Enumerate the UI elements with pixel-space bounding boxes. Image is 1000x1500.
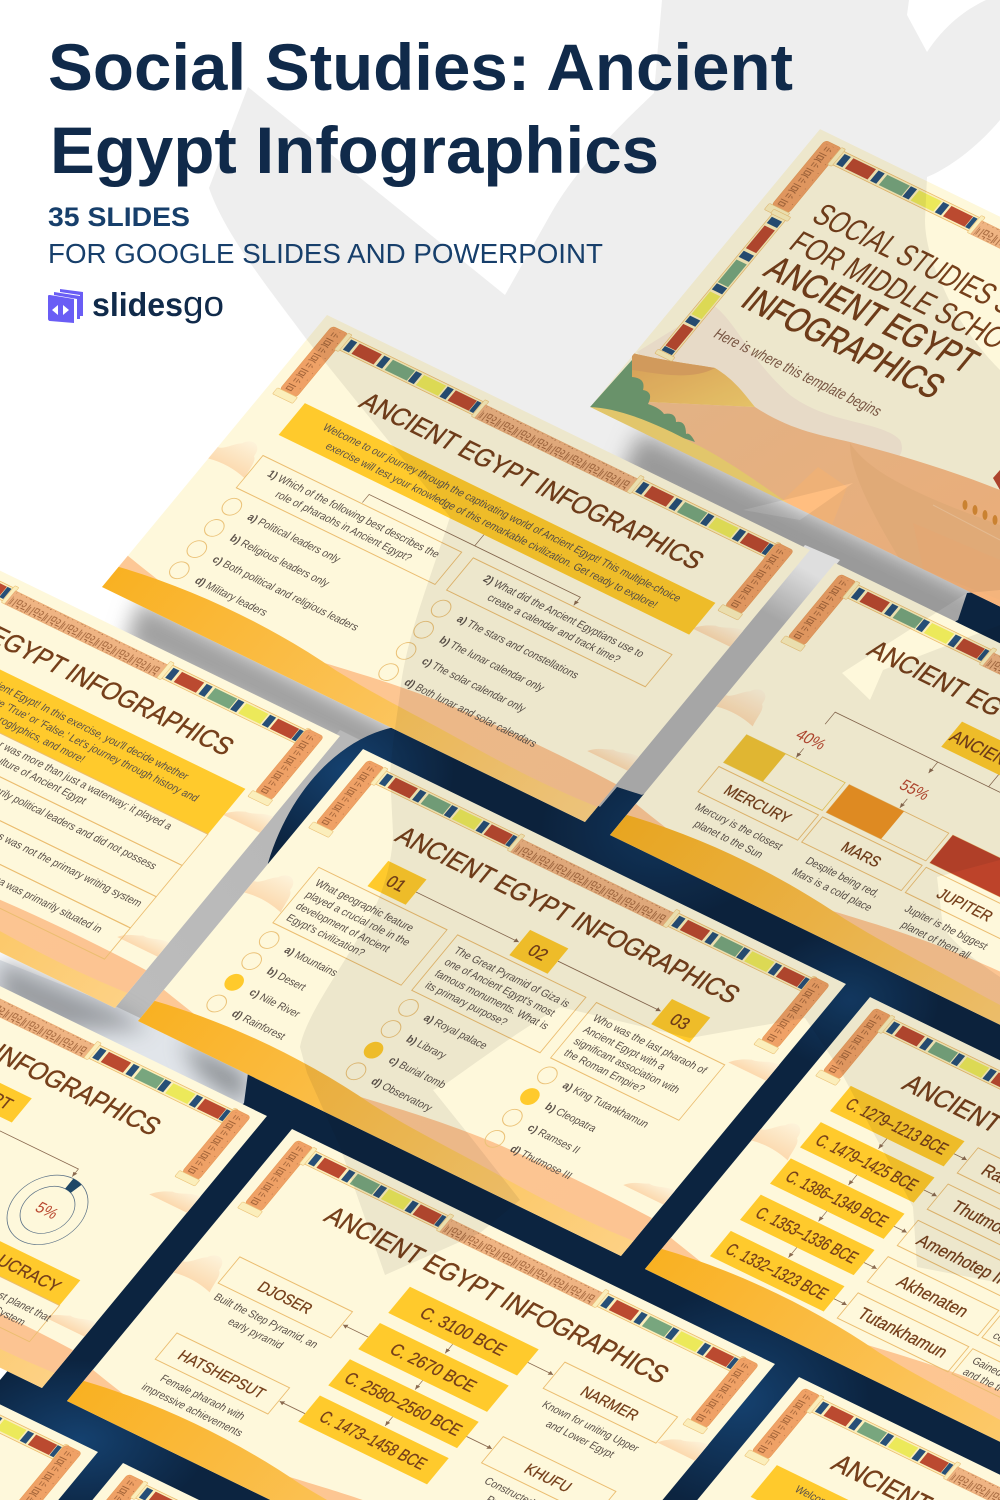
subtitle: slide count: 35 SLIDES	[48, 202, 190, 232]
question 1: What geographic feature	[312, 877, 417, 934]
main title: Egypt Infographics	[50, 113, 659, 187]
column: Mercury: planet to the Sun	[691, 818, 766, 861]
name boxes: Akhenaten	[892, 1272, 973, 1321]
connector	[0, 1104, 78, 1177]
date tiles: C. 1279–1213 BCE	[841, 1095, 952, 1158]
box: Narmer: NARMER	[576, 1384, 642, 1424]
column: Mars	[778, 759, 970, 919]
box: Hatshepsut: impressive achievements	[139, 1381, 245, 1439]
date tiles: C. 1479–1425 BCE	[811, 1131, 922, 1195]
date tiles: C. 1353–1336 BCE	[751, 1204, 862, 1267]
slide: multiple choice quiz	[102, 315, 810, 822]
main title	[48, 30, 793, 187]
question 1: Egypt's civilization?	[283, 912, 367, 959]
date tiles	[298, 1287, 539, 1484]
question 3: b) Cleopatra	[542, 1101, 599, 1135]
heading: ANCIENT EGYPT INFOGRAPHICS	[353, 388, 710, 575]
question 1: a) Mountains	[281, 944, 340, 979]
number tiles: 01	[382, 872, 410, 895]
slide: three-question quiz	[138, 749, 846, 1256]
question 3: Ancient Egypt with a	[580, 1024, 668, 1073]
donut 5%: 5%	[31, 1200, 62, 1223]
logo wordmark	[92, 283, 224, 324]
date tiles: C. 1332–1323 BCE	[721, 1240, 832, 1303]
box: Djoser: early pyramid	[225, 1316, 286, 1352]
pale shadow area beneath true-false slide	[0, 960, 250, 1106]
column: Mars: 55%	[895, 777, 933, 804]
box: Djoser: DJOSER	[253, 1279, 316, 1318]
shadow band between true-false slide and multi-question slide	[110, 730, 370, 1022]
slide: bureaucracy chart	[0, 881, 267, 1388]
box: Narmer: and Lower Egypt	[543, 1418, 617, 1460]
heading: ANCIENT EGYPT INFOGRAPHICS	[318, 1202, 675, 1389]
box: Khufu	[458, 1437, 616, 1500]
question 2: d) Both lunar and solar calendars	[401, 677, 539, 750]
slide: dates and pharaohs	[645, 997, 1000, 1500]
column: Mars: MARS	[837, 839, 885, 871]
question 1: c) Both political and religious leaders	[209, 554, 361, 634]
slide: bottom right welcome	[574, 1377, 1000, 1500]
background silhouette of Egyptian figure	[209, 0, 1000, 1283]
question 2	[342, 935, 586, 1137]
slide: timeline of pharaohs	[67, 1129, 775, 1500]
cover title: INFOGRAPHICS	[733, 280, 953, 406]
cover subtitle: Here is where this template begins	[710, 327, 885, 420]
icon: slidesgo logo mark	[48, 289, 83, 323]
top tile	[0, 1038, 32, 1123]
question 2: 2) What did the Ancient Egyptians use to	[480, 573, 647, 660]
main title: Social Studies: Ancient	[48, 30, 793, 104]
question 2: b) The lunar calendar only	[436, 634, 547, 694]
question 2: one of Ancient Egypt's most	[441, 957, 558, 1019]
column: Mercury: Mercury is the closest	[692, 801, 785, 853]
description box	[0, 1242, 61, 1342]
box: Djoser: Built the Step Pyramid, an	[211, 1291, 321, 1351]
date tiles: C. 1386–1349 BCE	[781, 1167, 892, 1231]
logo wordmark: slides	[92, 286, 183, 323]
number tiles	[367, 861, 710, 1043]
box: Narmer	[519, 1362, 678, 1472]
box: Hatshepsut: Female pharaoh with	[157, 1373, 248, 1423]
banner	[0, 589, 245, 834]
name boxes: Tutankhamun	[853, 1304, 952, 1362]
question 2: its primary purpose?	[422, 980, 510, 1028]
question 1: b) Religious leaders only	[227, 533, 332, 590]
name boxes	[837, 1148, 1000, 1372]
slide: planets percentages	[610, 563, 1000, 1070]
logo wordmark: go	[183, 283, 224, 324]
question 1: 1) Which of the following best describes the	[264, 468, 442, 561]
shadow blob under true-false slide	[0, 960, 150, 1030]
banner: exercise will test your knowledge of this remarkable civilization. Get ready to explore!	[322, 441, 660, 611]
question 2: c) Burial tomb	[386, 1055, 449, 1091]
box: Narmer: Known for uniting Upper	[539, 1399, 642, 1455]
shadow under quiz slide	[125, 600, 585, 860]
question 2: create a calendar and track time?	[484, 592, 623, 665]
slide: bottom centre fragment	[0, 1463, 606, 1500]
number tiles: 02	[524, 941, 552, 964]
question 1	[165, 456, 462, 671]
question 2: famous monuments. What is	[432, 968, 551, 1032]
column: Jupiter	[882, 835, 1000, 970]
question 3: Who was the last pharaoh of	[590, 1013, 709, 1077]
column: Jupiter: Jupiter is the biggest	[902, 903, 990, 952]
column: Mercury: MERCURY	[720, 782, 795, 827]
description boxes	[952, 1312, 1000, 1452]
box: Djoser	[195, 1257, 353, 1366]
column: Mars: Despite being red,	[803, 855, 882, 900]
slide: cover	[590, 129, 1000, 607]
question 1: development of Ancient	[293, 901, 392, 955]
column: Jupiter: JUPITER	[932, 886, 996, 925]
banner: Welcome to our journey through the captivating world of Ancient Egypt! This multiple-choice	[320, 422, 684, 605]
question 1	[203, 867, 447, 1070]
connectors	[825, 700, 1000, 874]
column: Mercury: 40%	[792, 727, 829, 754]
shadow blob under multi-question slide	[180, 1040, 246, 1106]
box: Hatshepsut: HATSHEPSUT	[174, 1347, 269, 1402]
number tiles: 03	[666, 1010, 694, 1034]
question 3: a) King Tutankhamun	[560, 1080, 651, 1130]
question 2: The Great Pyramid of Giza is	[451, 945, 572, 1010]
shadow band between quiz slide and planets slide	[580, 545, 840, 840]
connector arrows	[777, 1126, 967, 1305]
question 2: b) Library	[403, 1033, 450, 1062]
cover frame	[654, 141, 1000, 416]
question 3: c) Ramses II	[525, 1122, 583, 1156]
shadow under cover slide	[620, 432, 1000, 665]
tile: bureaucracy	[0, 1217, 80, 1305]
date tiles: C. 1473–1458 BCE	[315, 1407, 431, 1473]
question 1: d) Rainforest	[229, 1008, 288, 1043]
question 1: a) Political leaders only	[244, 511, 344, 566]
banner	[751, 1465, 1000, 1500]
question 3	[481, 1002, 725, 1205]
donut 5%	[0, 1163, 105, 1256]
question 1: c) Nile River	[246, 987, 303, 1020]
column: Mercury	[674, 709, 866, 869]
question 3: the Roman Empire?	[561, 1047, 647, 1095]
date tiles: C. 2580–2560 BCE	[340, 1369, 466, 1440]
connector	[362, 483, 590, 605]
column: Mars: Mars is a cold place	[789, 866, 875, 914]
box: Hatshepsut	[131, 1333, 290, 1443]
question 2: c) The solar calendar only	[419, 656, 529, 715]
question 1: role of pharaohs in Ancient Egypt?	[272, 489, 414, 564]
question 2: d) Observatory	[368, 1076, 436, 1114]
question 1: d) Military leaders	[192, 575, 270, 619]
heading: ANCIENT EGYPT INFOGRAPHICS	[389, 822, 746, 1009]
slide: true or false	[0, 501, 340, 1008]
subtitle: platforms: FOR GOOGLE SLIDES AND POWERPOINT	[48, 238, 603, 269]
question 1: played a crucial role in the	[302, 889, 413, 949]
question 3: d) Thutmose III	[507, 1143, 575, 1182]
cover scene: desert dunes	[590, 306, 1000, 607]
slide: bottom left fragment	[0, 1217, 98, 1500]
column: Jupiter: planet of them all	[898, 919, 973, 962]
date tiles: C. 2670 BCE	[386, 1340, 481, 1396]
navy backdrop shape	[0, 592, 1000, 1500]
question 3: significant association with	[571, 1036, 682, 1096]
date tiles: C. 3100 BCE	[416, 1304, 511, 1359]
box: Khufu: KHUFU	[520, 1461, 575, 1496]
date tiles	[710, 1086, 965, 1311]
question 1: b) Desert	[264, 966, 309, 993]
question 2: a) Royal palace	[421, 1012, 490, 1052]
question 2	[375, 558, 672, 773]
connector arrows	[280, 1288, 553, 1489]
statement rows	[0, 634, 208, 959]
question 2: a) The stars and constellations	[454, 613, 581, 681]
banner	[279, 403, 715, 635]
